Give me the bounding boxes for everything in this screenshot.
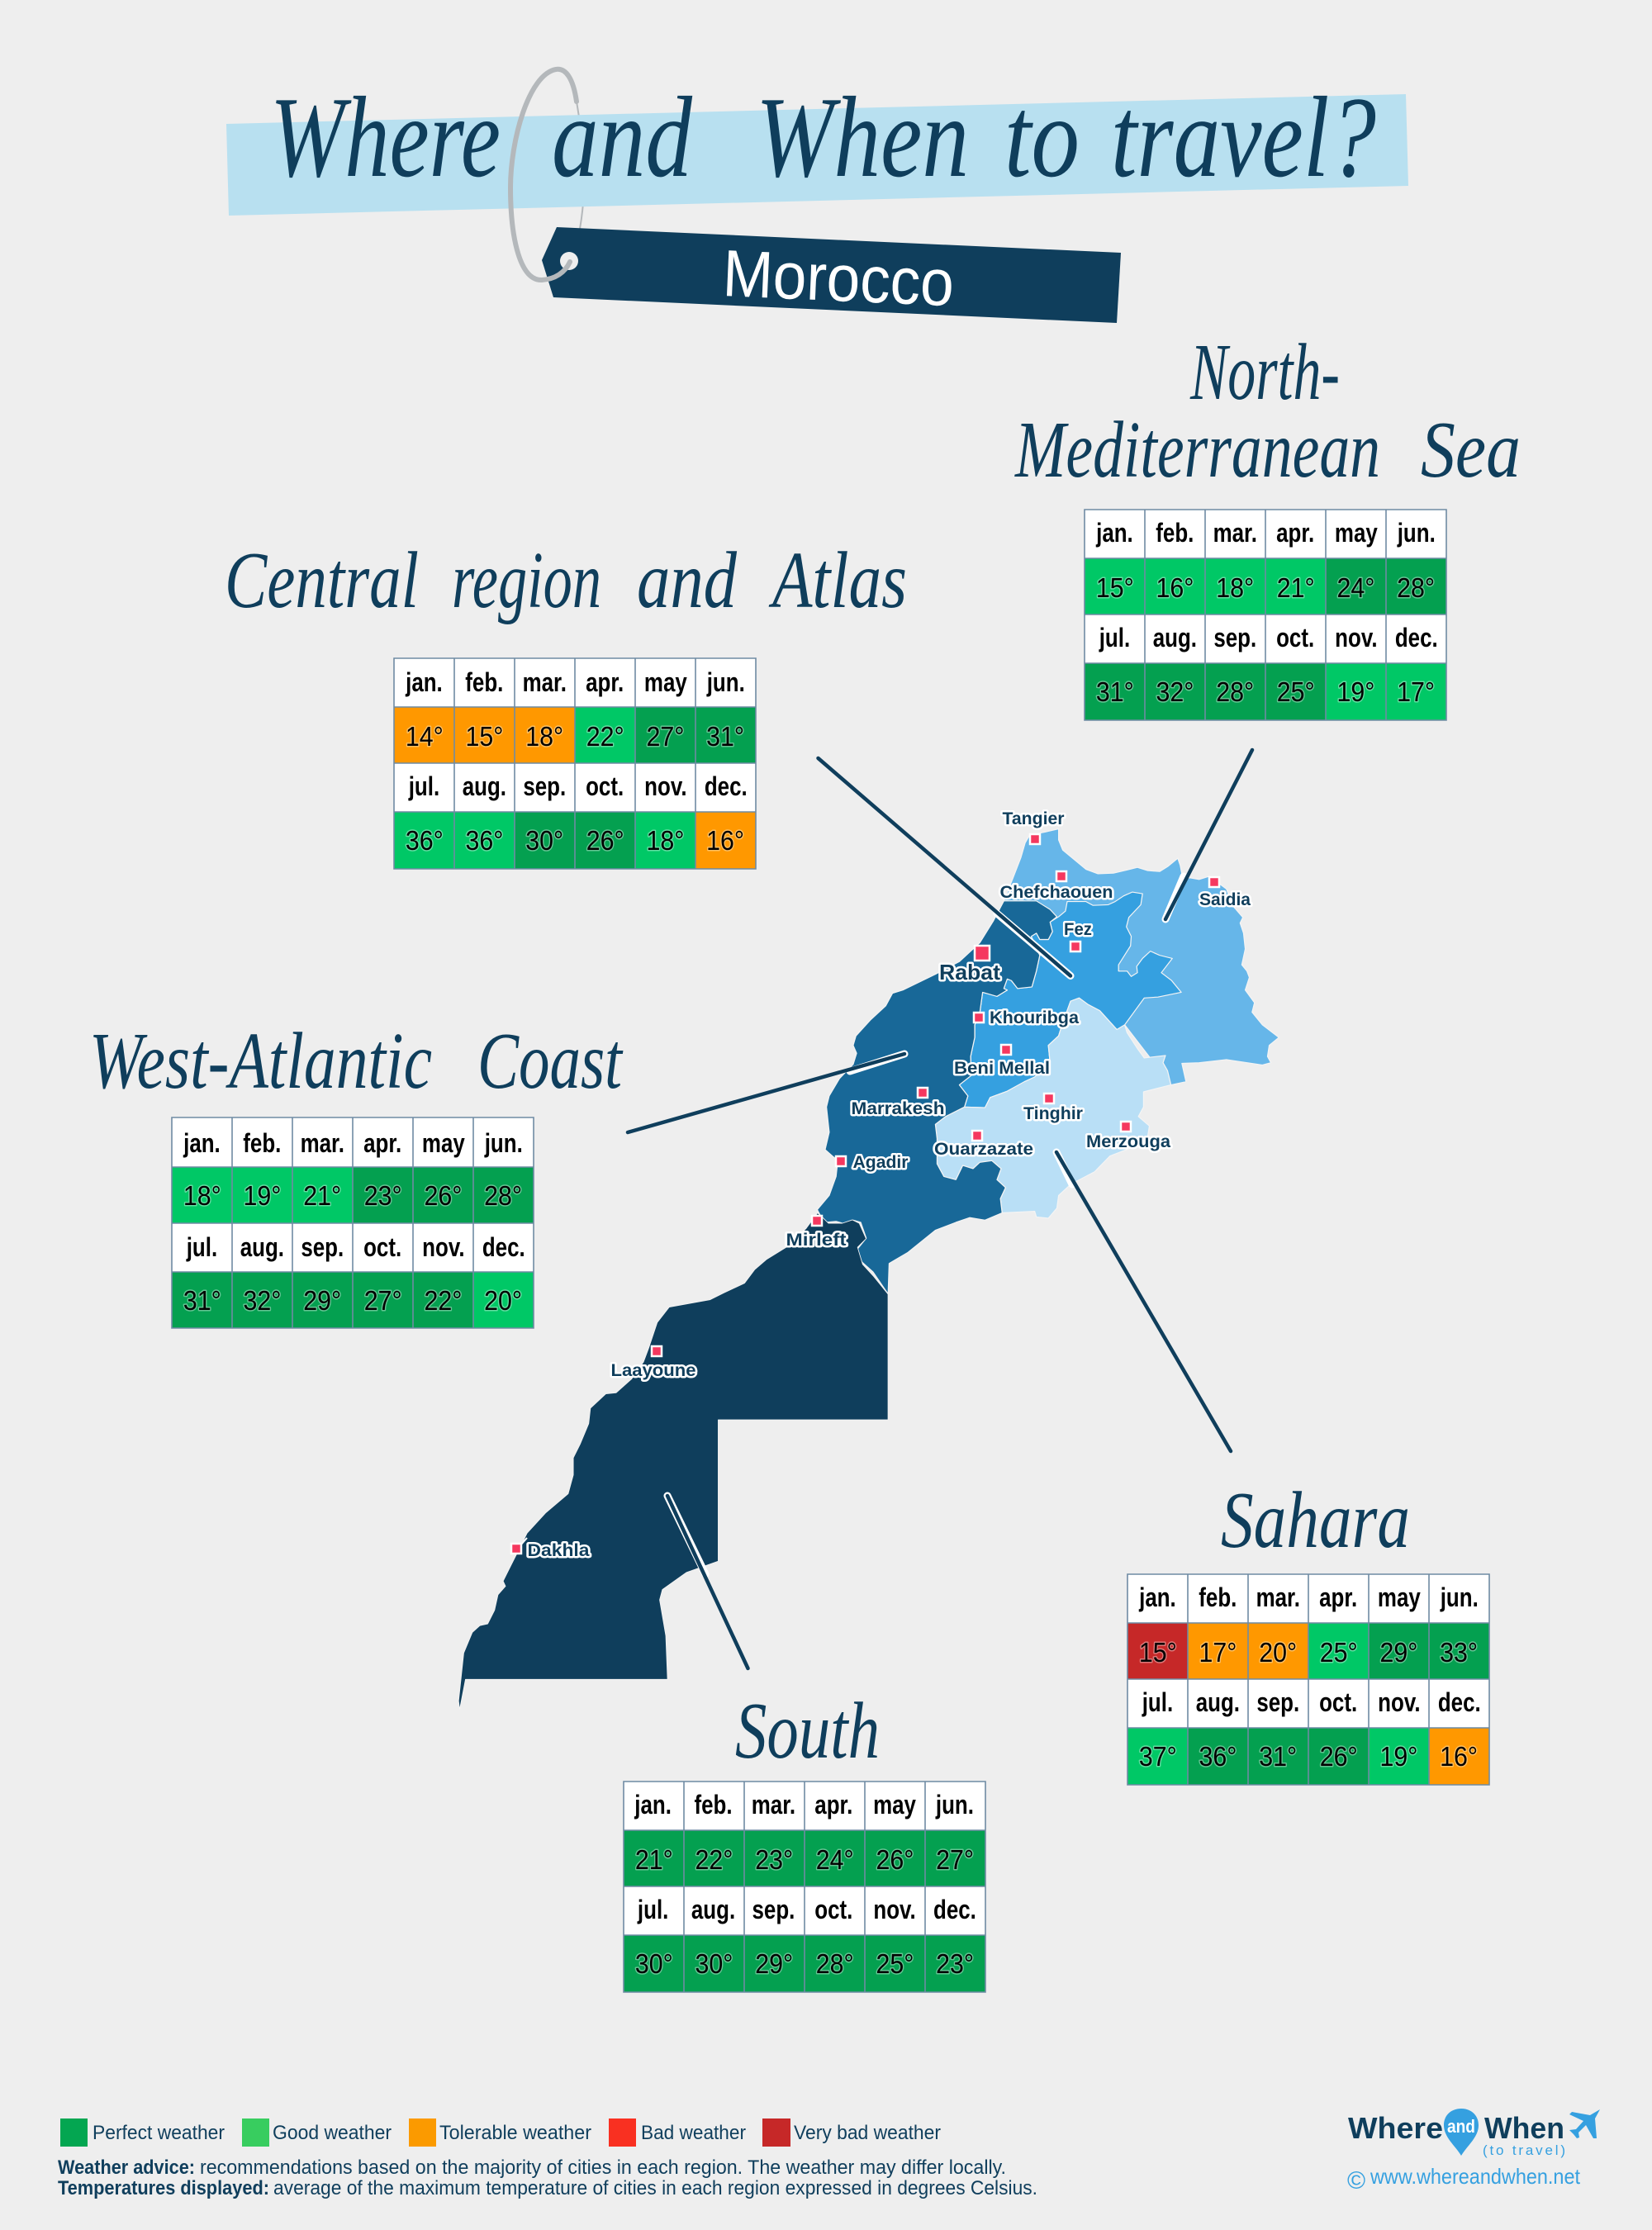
region: west atlantic coast [817, 901, 1057, 1294]
legend: bad weather [609, 2118, 746, 2147]
months second half: aug. [1196, 1689, 1240, 1718]
heading: Central region and Atlas: Atlas [768, 536, 907, 625]
temperatures first half: 18° [525, 721, 563, 752]
temperatures second half: 31° [1096, 676, 1134, 707]
months second half: oct. [363, 1234, 401, 1263]
region: north mediterranean [1004, 829, 1279, 1085]
months second half [408, 773, 748, 802]
months first half: apr. [1276, 520, 1314, 548]
pointer line: south [667, 1496, 748, 1668]
table: Central region and Atlas [394, 658, 756, 869]
temperatures first half: 27° [936, 1844, 974, 1875]
pointer line: west [628, 1054, 904, 1132]
temperatures second half: 18° [646, 825, 684, 856]
months second half: jul. [186, 1234, 217, 1263]
temperatures first half: 24° [816, 1844, 854, 1875]
months second half: dec. [1395, 624, 1438, 653]
months second half: aug. [240, 1234, 284, 1263]
temperatures first half [183, 1180, 522, 1211]
temperatures second half: 22° [424, 1285, 462, 1316]
heading: Central region and Atlas: Central [225, 536, 419, 625]
temperatures second half: 36° [406, 825, 444, 856]
months first half: may [1335, 520, 1379, 548]
temperatures second half: 30° [635, 1948, 673, 1979]
country tag [542, 227, 1121, 323]
website: © [1347, 2167, 1365, 2194]
notes: recommendations based on the majority of cities in each region. The weather may differ locally. [200, 2156, 1006, 2179]
months first half: jan. [634, 1791, 672, 1820]
table: North Mediterranean Sea [1085, 510, 1446, 720]
city: Mirleft [786, 1216, 847, 1250]
temperatures second half: 29° [303, 1285, 341, 1316]
months second half: oct. [1319, 1689, 1357, 1718]
temperatures second half: 25° [1277, 676, 1315, 707]
legend: good weather: Good weather [273, 2122, 392, 2144]
months first half: jun. [935, 1791, 974, 1820]
temperatures first half: 22° [586, 721, 624, 752]
months first half: apr. [814, 1791, 852, 1820]
months first half: mar. [1213, 520, 1257, 548]
city: Ouarzazate [934, 1131, 1033, 1159]
temperatures second half: 27° [364, 1285, 402, 1316]
temperatures first half: 15° [1096, 572, 1134, 603]
temperatures second half: 20° [484, 1285, 522, 1316]
months first half: mar. [1256, 1584, 1300, 1613]
months first half: may [422, 1130, 466, 1159]
legend: perfect weather: Perfect weather [93, 2122, 225, 2144]
months second half: nov. [1378, 1689, 1421, 1718]
temperatures second half: 30° [695, 1948, 733, 1979]
title [270, 74, 1376, 202]
months second half: jul. [1142, 1689, 1173, 1718]
temperatures second half: 19° [1336, 676, 1374, 707]
city: Mirleft: Mirleft [786, 1231, 847, 1250]
city: Chefchaouen: Chefchaouen [999, 883, 1113, 902]
temperatures second half [1139, 1741, 1478, 1772]
temperatures second half: 32° [1156, 676, 1194, 707]
temperatures first half: 23° [364, 1180, 402, 1211]
temperatures second half: 19° [1379, 1741, 1417, 1772]
legend: bad weather: Bad weather [641, 2122, 746, 2144]
city: Merzouga: Merzouga [1086, 1132, 1170, 1151]
temperatures second half: 16° [706, 825, 744, 856]
city: Tinghir [1023, 1094, 1083, 1123]
temperatures first half: 19° [244, 1180, 281, 1211]
notes: average of the maximum temperature of cities in each region expressed in degrees Celsius. [273, 2177, 1037, 2199]
city: Dakhla [511, 1538, 590, 1560]
temperatures first half: 28° [484, 1180, 522, 1211]
title: and [552, 74, 693, 202]
legend: very bad weather: Very bad weather [794, 2122, 941, 2144]
city: Laayoune: Laayoune [611, 1361, 695, 1380]
city: Chefchaouen [999, 871, 1113, 902]
heading: South: South [735, 1687, 880, 1776]
months first half: may [644, 669, 688, 698]
temperatures first half: 33° [1440, 1637, 1478, 1668]
months first half: may [1378, 1584, 1422, 1613]
months second half: sep. [1256, 1689, 1299, 1718]
months second half: jul. [408, 773, 439, 802]
months first half: apr. [586, 669, 624, 698]
logo word: When: When [1484, 2111, 1564, 2145]
temperatures second half [183, 1285, 522, 1316]
temperatures first half: 21° [1277, 572, 1315, 603]
city: Rabat [939, 946, 1000, 985]
months second half: sep. [301, 1234, 344, 1263]
months first half: mar. [523, 669, 567, 698]
temperatures first half: 17° [1199, 1637, 1237, 1668]
city: Khouribga: Khouribga [990, 1008, 1079, 1027]
heading: North Mediterranean Sea: Mediterranean [1014, 406, 1380, 495]
table: West-Atlantic Coast [172, 1117, 534, 1328]
pointer line: sahara [1056, 1152, 1231, 1451]
temperatures second half: 32° [244, 1285, 281, 1316]
temperatures first half [635, 1844, 974, 1875]
months second half [1099, 624, 1438, 653]
months second half: dec. [1438, 1689, 1481, 1718]
months second half: nov. [873, 1896, 916, 1925]
temperatures second half: 31° [183, 1285, 221, 1316]
temperatures second half: 23° [936, 1948, 974, 1979]
months first half: feb. [465, 669, 503, 698]
temperatures first half: 26° [424, 1180, 462, 1211]
months second half [1142, 1689, 1481, 1718]
months first half: jun. [1440, 1584, 1479, 1613]
temperatures first half: 31° [706, 721, 744, 752]
logo word: and: and [1447, 2116, 1475, 2137]
temperatures second half: 36° [1199, 1741, 1237, 1772]
temperatures first half: 16° [1156, 572, 1194, 603]
months first half: jun. [1397, 520, 1436, 548]
temperatures second half: 26° [586, 825, 624, 856]
notes: Weather advice: [58, 2156, 195, 2179]
months second half [637, 1896, 976, 1925]
legend: perfect weather [60, 2118, 225, 2147]
months second half: oct. [1276, 624, 1314, 653]
months first half [405, 669, 745, 698]
city: Tangier [1003, 809, 1064, 844]
months second half: nov. [644, 773, 687, 802]
months second half: sep. [1213, 624, 1256, 653]
table: Sahara [1127, 1574, 1489, 1785]
city: Tangier: Tangier [1003, 809, 1064, 828]
region: central and atlas [959, 892, 1181, 1108]
temperatures first half: 27° [646, 721, 684, 752]
city markers and labels [511, 809, 1251, 1560]
months first half: jan. [183, 1130, 221, 1159]
months first half: jan. [1138, 1584, 1176, 1613]
title: When [756, 74, 969, 202]
luggage tag string back [577, 102, 584, 229]
temperatures first half [1096, 572, 1435, 603]
temperatures second half: 28° [816, 1948, 854, 1979]
temperatures second half [406, 825, 744, 856]
heading: North Mediterranean Sea: North- [1189, 328, 1340, 417]
city: Ouarzazate: Ouarzazate [934, 1140, 1033, 1159]
months second half: aug. [691, 1896, 735, 1925]
heading: Central region and Atlas [225, 536, 907, 625]
temperatures first half: 21° [635, 1844, 673, 1875]
months second half: aug. [463, 773, 506, 802]
legend: tolerable weather: Tolerable weather [439, 2122, 591, 2144]
temperatures first half: 29° [1379, 1637, 1417, 1668]
months first half [1095, 520, 1436, 548]
temperatures second half [635, 1948, 974, 1979]
heading: Sahara: Sahara [1221, 1476, 1410, 1565]
city: Laayoune [611, 1346, 695, 1380]
luggage tag string front [510, 69, 577, 280]
temperatures first half [406, 721, 744, 752]
months second half: dec. [705, 773, 748, 802]
city: Agadir: Agadir [852, 1153, 909, 1172]
months first half: apr. [363, 1130, 401, 1159]
temperatures first half: 28° [1397, 572, 1435, 603]
table: South [624, 1782, 985, 1992]
map of Morocco [458, 829, 1279, 1710]
city: Fez [1064, 920, 1092, 951]
legend: very bad weather [762, 2118, 941, 2147]
temperatures first half: 15° [1139, 1637, 1177, 1668]
temperatures second half: 30° [525, 825, 563, 856]
months second half: jul. [637, 1896, 668, 1925]
title: travel? [1111, 74, 1376, 202]
temperatures first half: 25° [1320, 1637, 1358, 1668]
heading: North Mediterranean Sea: Sea [1421, 406, 1521, 495]
notes [58, 2156, 1037, 2199]
notes: Temperatures displayed: [58, 2177, 269, 2199]
city: Merzouga [1086, 1122, 1170, 1151]
country name: Morocco [721, 236, 956, 320]
months second half: dec. [482, 1234, 525, 1263]
city: Tinghir: Tinghir [1023, 1104, 1083, 1123]
temperatures second half: 16° [1440, 1741, 1478, 1772]
region: south [458, 1213, 888, 1710]
temperatures first half: 24° [1336, 572, 1374, 603]
temperatures first half: 22° [695, 1844, 733, 1875]
months second half [186, 1234, 525, 1263]
legend: tolerable weather [409, 2118, 591, 2147]
city: Dakhla: Dakhla [527, 1541, 590, 1560]
months second half: sep. [523, 773, 566, 802]
temperatures first half: 21° [303, 1180, 341, 1211]
months first half: jun. [484, 1130, 523, 1159]
pointer line: central region [818, 758, 1070, 976]
temperatures second half: 26° [1320, 1741, 1358, 1772]
temperatures first half: 15° [466, 721, 503, 752]
temperatures first half: 26° [876, 1844, 914, 1875]
temperatures first half: 14° [406, 721, 444, 752]
months second half: nov. [422, 1234, 465, 1263]
months first half: may [873, 1791, 917, 1820]
legend: good weather [242, 2118, 392, 2147]
temperatures second half: 37° [1139, 1741, 1177, 1772]
months second half: aug. [1153, 624, 1197, 653]
months second half: jul. [1099, 624, 1130, 653]
months second half: oct. [586, 773, 624, 802]
temperatures second half: 25° [876, 1948, 914, 1979]
temperatures second half: 28° [1216, 676, 1254, 707]
heading: North Mediterranean Sea [1014, 328, 1521, 495]
city: Marrakesh: Marrakesh [851, 1099, 945, 1118]
city: Fez: Fez [1064, 920, 1092, 939]
temperatures second half [1096, 676, 1435, 707]
months first half: jan. [1095, 520, 1133, 548]
legend [60, 2118, 941, 2147]
months second half: nov. [1335, 624, 1378, 653]
months first half: mar. [301, 1130, 344, 1159]
months first half [1138, 1584, 1479, 1613]
months first half: mar. [752, 1791, 795, 1820]
months first half [634, 1791, 974, 1820]
region: sahara [935, 998, 1171, 1218]
city: Rabat: Rabat [939, 960, 1000, 985]
logo [1347, 2109, 1600, 2194]
months first half: apr. [1319, 1584, 1357, 1613]
logo tagline: (to travel) [1483, 2142, 1565, 2158]
title: Where [270, 74, 501, 202]
pointer line: north [1165, 750, 1252, 919]
months first half: jun. [706, 669, 745, 698]
months second half: oct. [814, 1896, 852, 1925]
months first half: feb. [695, 1791, 733, 1820]
temperatures second half: 36° [466, 825, 503, 856]
temperatures second half: 31° [1259, 1741, 1297, 1772]
months first half: feb. [1156, 520, 1194, 548]
title banner [226, 94, 1408, 216]
temperatures first half: 20° [1259, 1637, 1297, 1668]
heading: Central region and Atlas: region [452, 536, 601, 625]
heading: West-Atlantic Coast: Coast [477, 1017, 624, 1106]
city: Saidia: Saidia [1199, 890, 1251, 909]
months first half [183, 1130, 523, 1159]
icon: map pin [1444, 2109, 1479, 2156]
website: www.whereandwhen.net [1370, 2164, 1581, 2189]
city: Beni Mellal [954, 1045, 1050, 1078]
temperatures first half: 18° [183, 1180, 221, 1211]
months first half: feb. [243, 1130, 281, 1159]
temperatures first half: 18° [1216, 572, 1254, 603]
temperatures first half [1139, 1637, 1478, 1668]
temperatures first half: 23° [755, 1844, 793, 1875]
temperatures second half: 17° [1397, 676, 1435, 707]
city: Saidia [1199, 877, 1251, 909]
months first half: feb. [1199, 1584, 1237, 1613]
months second half: dec. [933, 1896, 976, 1925]
months first half: jan. [405, 669, 443, 698]
website [1347, 2164, 1581, 2194]
city: Beni Mellal: Beni Mellal [954, 1059, 1050, 1078]
temperatures second half: 29° [755, 1948, 793, 1979]
title: to [1004, 74, 1080, 202]
heading: Central region and Atlas: and [637, 536, 738, 625]
logo word: Where: Where [1348, 2111, 1443, 2145]
heading: West-Atlantic Coast: West-Atlantic [89, 1017, 432, 1106]
icon: plane [1569, 2109, 1600, 2138]
city: Marrakesh [851, 1088, 945, 1118]
months second half: sep. [752, 1896, 795, 1925]
